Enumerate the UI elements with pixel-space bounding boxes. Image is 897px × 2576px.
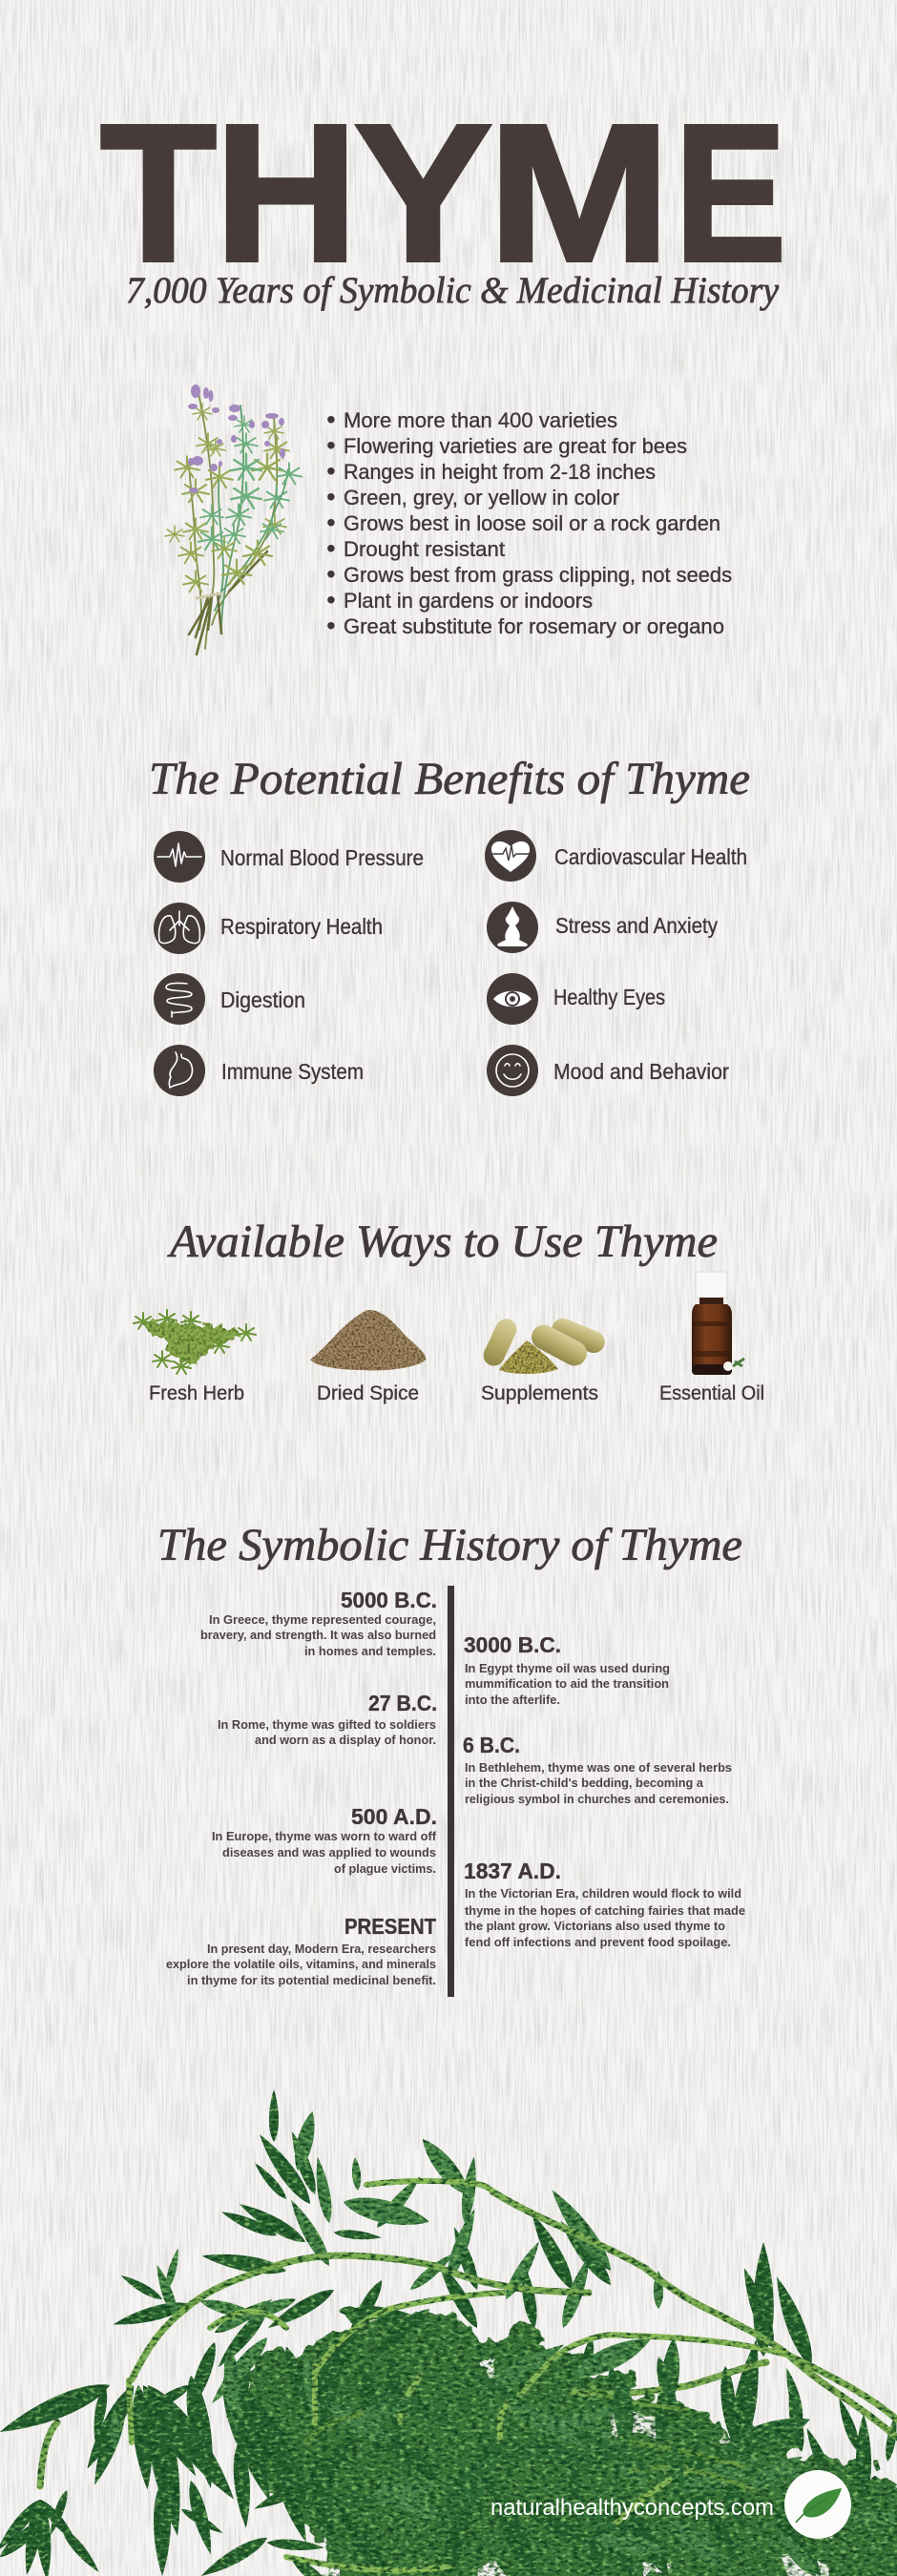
heading: symbolic history: The Symbolic History of Thyme — [157, 1520, 742, 1570]
bullet list: Drought resistant — [344, 537, 505, 561]
logo: leaf badge — [784, 2470, 851, 2539]
item: dried spice: Dried Spice — [317, 1381, 419, 1404]
entry: 1837 A.D.: In the Victorian Era, children would flock to wild — [465, 1887, 741, 1901]
bullet list: Great substitute for rosemary or oregano — [344, 614, 724, 638]
benefit: immune system: Immune System — [221, 1059, 364, 1084]
entry: 27 B.C.: and worn as a display of honor. — [255, 1734, 436, 1747]
item: dried spice — [310, 1310, 426, 1404]
entry: 6 B.C.: religious symbol in churches and ceremonies. — [465, 1793, 729, 1806]
bullet list: • — [326, 405, 336, 434]
entry: 1837 A.D. — [464, 1859, 745, 1949]
title: E — [675, 84, 786, 302]
item: fresh herb: Fresh Herb — [149, 1381, 244, 1404]
entry: 6 B.C. — [463, 1733, 732, 1806]
item: supplements: Supplements — [481, 1381, 598, 1404]
panel: benefits — [154, 830, 747, 1096]
bullet list: Grows best in loose soil or a rock garden — [344, 511, 720, 535]
benefit: cardiovascular health: Cardiovascular Health — [554, 844, 747, 869]
item: essential oil: Essential Oil — [659, 1381, 764, 1404]
bullet list: Plant in gardens or indoors — [344, 589, 593, 613]
entry: 6 B.C.: 6 B.C. — [463, 1733, 520, 1757]
mid leaves — [110, 2109, 897, 2576]
entry: 6 B.C.: in the Christ-child's bedding, becoming a — [465, 1776, 704, 1790]
benefit: cardiovascular health — [485, 830, 747, 882]
entry: present: PRESENT — [344, 1914, 436, 1939]
item: essential oil — [659, 1272, 764, 1404]
benefit: normal blood pressure: Normal Blood Pressure — [220, 845, 424, 870]
bullet list: Grows best from grass clipping, not seeds — [344, 563, 732, 587]
benefit: stress and anxiety — [487, 902, 718, 953]
benefit: mood and behavior — [487, 1045, 729, 1096]
entry: 27 B.C.: In Rome, thyme was gifted to soldiers — [218, 1718, 436, 1732]
bullet list: Ranges in height from 2-18 inches — [344, 460, 656, 484]
entry: 1837 A.D.: fend off infections and prevent food spoilage. — [465, 1936, 731, 1949]
bullet list — [326, 405, 732, 640]
title: T — [100, 84, 217, 302]
entry: present: in thyme for its potential medicinal benefit. — [187, 1974, 436, 1987]
bullet list: • — [326, 430, 336, 460]
bullet list: • — [326, 559, 336, 589]
entry: 1837 A.D.: 1837 A.D. — [464, 1859, 561, 1883]
entry: 500 A.D. — [212, 1804, 437, 1876]
benefit: respiratory health — [154, 903, 383, 954]
entry: 3000 B.C.: 3000 B.C. — [464, 1632, 561, 1657]
title: Y — [354, 84, 492, 302]
entry: 500 A.D.: diseases and was applied to wounds — [222, 1846, 436, 1859]
front leaves — [315, 2337, 814, 2546]
item: fresh herb — [134, 1310, 256, 1404]
bullet list: • — [326, 482, 336, 511]
entry: 6 B.C.: In Bethlehem, thyme was one of several herbs — [465, 1761, 732, 1775]
entry: 3000 B.C.: into the afterlife. — [465, 1693, 560, 1707]
entry: 27 B.C. — [218, 1691, 437, 1747]
entry: 5000 B.C. — [200, 1588, 437, 1658]
benefit: immune system — [154, 1045, 364, 1096]
entry: 500 A.D.: In Europe, thyme was worn to ward off — [212, 1830, 437, 1843]
bullet list: • — [326, 456, 336, 486]
bullet list: Flowering varieties are great for bees — [344, 434, 687, 458]
entry: 27 B.C.: 27 B.C. — [368, 1691, 437, 1715]
heading: benefits: The Potential Benefits of Thyme — [149, 754, 750, 804]
bullet list: More more than 400 varieties — [344, 408, 617, 432]
entry: present: In present day, Modern Era, researchers — [207, 1942, 436, 1956]
entry: 1837 A.D.: thyme in the hopes of catching fairies that made — [465, 1904, 745, 1918]
bullet list: • — [326, 611, 336, 640]
illustration: thyme bouquet — [165, 384, 302, 654]
entry: 500 A.D.: of plague victims. — [334, 1862, 436, 1876]
benefit: digestion — [154, 973, 305, 1025]
panel: thyme overview — [165, 384, 732, 654]
benefit: respiratory health: Respiratory Health — [220, 914, 383, 939]
illustration: thyme sprigs — [0, 2089, 897, 2576]
benefit: mood and behavior: Mood and Behavior — [553, 1059, 729, 1084]
entry: 3000 B.C.: In Egypt thyme oil was used during — [465, 1662, 670, 1675]
entry: 5000 B.C.: bravery, and strength. It was also burned — [200, 1629, 436, 1642]
entry: 3000 B.C.: mummification to aid the transition — [465, 1677, 669, 1691]
benefit: normal blood pressure — [154, 831, 424, 883]
benefit: healthy eyes — [487, 973, 665, 1025]
bullet list: Green, grey, or yellow in color — [344, 486, 619, 509]
entry: 1837 A.D.: the plant grow. Victorians also used thyme to — [465, 1920, 725, 1933]
entry: 5000 B.C.: In Greece, thyme represented courage, — [209, 1613, 436, 1627]
entry: 3000 B.C. — [464, 1632, 670, 1707]
subtitle: 7,000 Years of Symbolic & Medicinal History — [126, 270, 780, 311]
timeline — [166, 1586, 745, 1997]
back leaves: dark — [0, 2089, 897, 2576]
timeline axis — [448, 1586, 454, 1997]
panel: ways to use — [134, 1272, 764, 1404]
entry: 5000 B.C.: in homes and temples. — [304, 1645, 436, 1658]
website url: naturalhealthyconcepts.com — [490, 2495, 774, 2521]
entry: present: explore the volatile oils, vitamins, and minerals — [166, 1958, 436, 1971]
bullet list: • — [326, 585, 336, 614]
stems — [40, 2181, 897, 2570]
benefit: healthy eyes: Healthy Eyes — [553, 985, 665, 1009]
benefit: digestion: Digestion — [220, 987, 305, 1012]
bullet list: • — [326, 533, 336, 563]
benefit: stress and anxiety: Stress and Anxiety — [555, 913, 718, 938]
title: H — [215, 84, 358, 302]
entry: 5000 B.C.: 5000 B.C. — [341, 1588, 437, 1612]
entry: 500 A.D.: 500 A.D. — [351, 1804, 437, 1829]
bullet list: • — [326, 508, 336, 537]
heading: ways to use: Available Ways to Use Thyme — [167, 1216, 718, 1267]
entry: present — [166, 1914, 436, 1987]
item: supplements — [480, 1315, 608, 1404]
title: M — [488, 84, 671, 302]
